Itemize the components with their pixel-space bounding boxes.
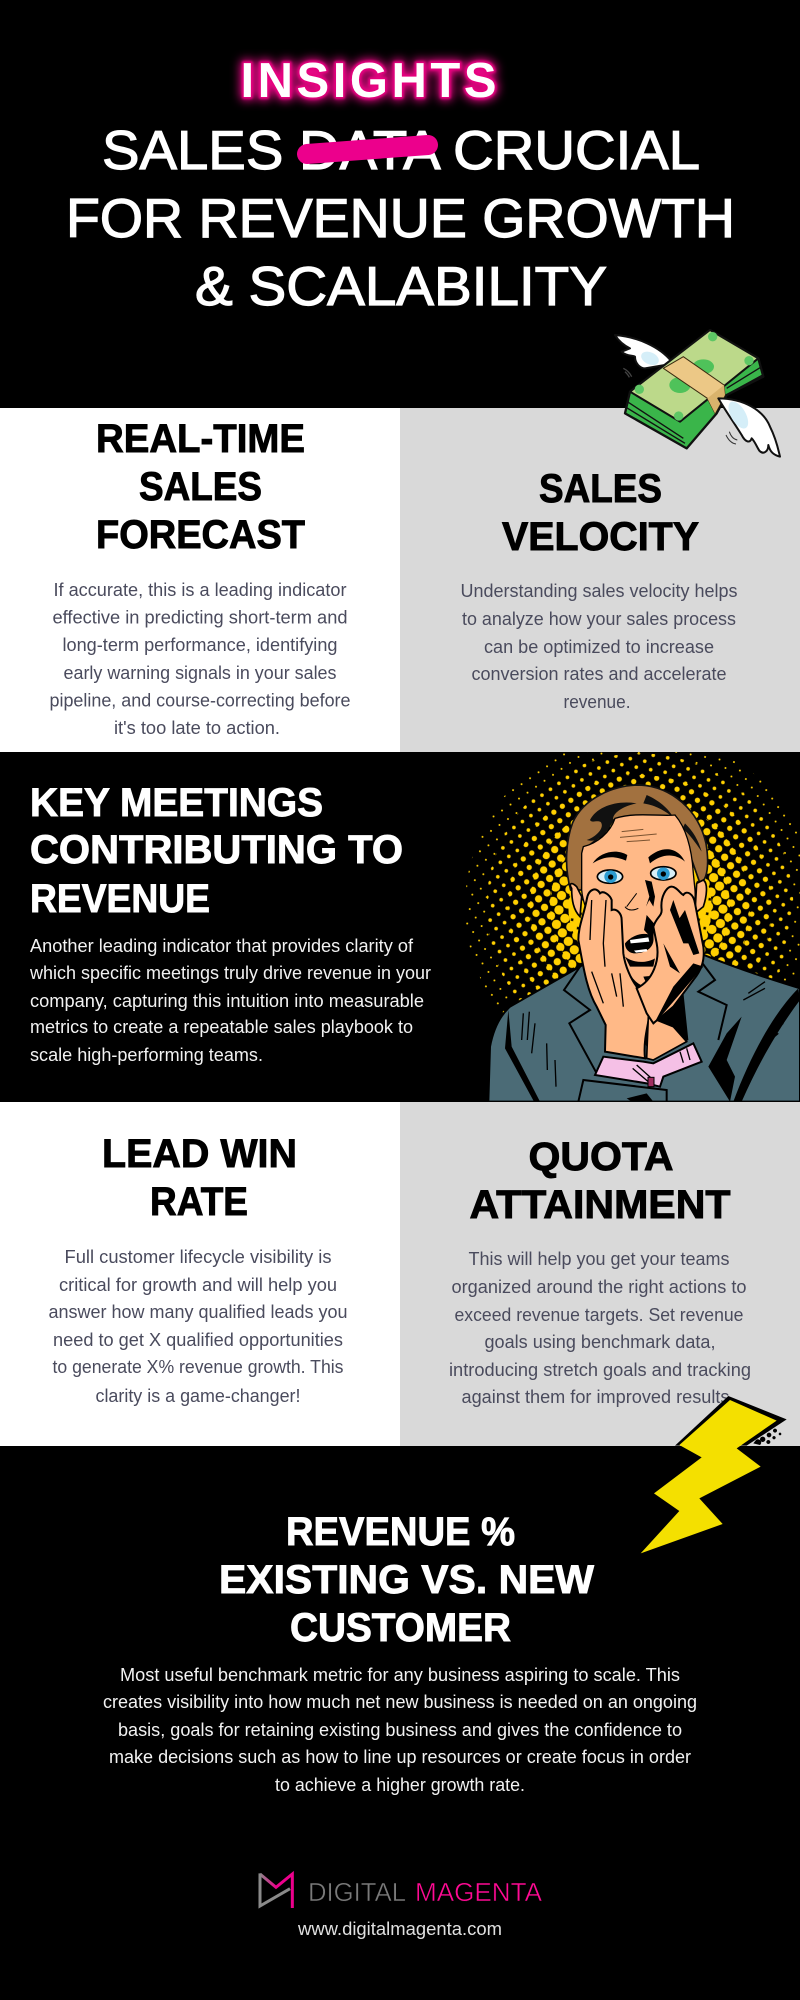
body text: lead win rate: Full customer lifecycle visibility is	[64, 1247, 332, 1267]
heading: lead win rate: RATE	[150, 1180, 248, 1224]
body text: lead win rate: answer how many qualified leads you	[48, 1302, 348, 1322]
body text: sales velocity: can be optimized to increase	[484, 637, 714, 657]
panel: quota attainment	[400, 1102, 800, 1446]
main title: SALES DATA CRUCIAL	[102, 119, 700, 181]
body text: sales velocity	[460, 581, 738, 712]
body text: quota attainment: against them for improved results.	[462, 1387, 734, 1407]
heading: sales velocity: VELOCITY	[502, 515, 699, 559]
body text: sales velocity: revenue.	[564, 692, 630, 712]
panel: real-time sales forecast	[0, 408, 400, 752]
body text: revenue existing vs new: creates visibility into how much net new business is needed on an ongoing	[103, 1692, 697, 1712]
main title: & SCALABILITY	[195, 255, 607, 317]
body text: real-time sales forecast: long-term performance, identifying	[62, 635, 338, 655]
heading: key meetings contributing to revenue: REVENUE	[30, 877, 210, 921]
body text: key meetings: scale high-performing teams.	[30, 1045, 263, 1065]
body text: quota attainment: This will help you get your teams	[468, 1249, 730, 1269]
logo: digital magenta	[260, 1873, 542, 1939]
panel: revenue existing vs new	[0, 1446, 800, 2000]
heading: real-time sales forecast: REAL-TIME	[96, 417, 305, 461]
heading: revenue existing vs new customer: EXISTING VS. NEW	[219, 1558, 594, 1602]
heading: sales velocity	[502, 467, 699, 559]
body text: real-time sales forecast: early warning signals in your sales	[64, 663, 336, 683]
main title: FOR REVENUE GROWTH	[66, 187, 735, 249]
heading: sales velocity: SALES	[539, 467, 662, 511]
body text: real-time sales forecast	[50, 580, 350, 738]
body text: quota attainment: exceed revenue targets. Set revenue	[454, 1305, 744, 1325]
body text: quota attainment: goals using benchmark data,	[484, 1332, 716, 1352]
body text: lead win rate: need to get X qualified opportunities	[53, 1330, 343, 1350]
heading: quota attainment: ATTAINMENT	[470, 1183, 730, 1227]
panel: sales velocity	[400, 408, 800, 752]
heading: real-time sales forecast: SALES	[139, 465, 262, 509]
panel: key meetings	[0, 732, 800, 1102]
illustration: lightning bolt	[641, 1396, 787, 1553]
body text: lead win rate: critical for growth and will help you	[59, 1275, 337, 1295]
heading: key meetings contributing to revenue: CONTRIBUTING TO	[30, 828, 403, 872]
body text: real-time sales forecast: it's too late to action.	[114, 718, 280, 738]
body text: lead win rate	[48, 1247, 348, 1406]
title block	[66, 54, 735, 317]
logo wordmark: DIGITAL	[308, 1879, 406, 1907]
body text: quota attainment: organized around the right actions to	[452, 1277, 746, 1297]
magenta strikethrough over DATA	[307, 145, 428, 154]
body text: key meetings: metrics to create a repeatable sales playbook to	[30, 1017, 413, 1037]
body text: real-time sales forecast: effective in predicting short-term and	[52, 608, 348, 628]
body text: real-time sales forecast: pipeline, and course-correcting before	[50, 690, 350, 710]
heading: lead win rate	[102, 1132, 297, 1224]
heading: revenue existing vs new customer: CUSTOMER	[290, 1606, 511, 1650]
body text: real-time sales forecast: If accurate, this is a leading indicator	[54, 580, 347, 600]
neon label: insights: INSIGHTS	[240, 54, 496, 108]
neon label: insights: INSIGHTS	[240, 54, 496, 108]
body text: quota attainment	[449, 1249, 751, 1407]
heading: lead win rate: LEAD WIN	[102, 1132, 297, 1176]
body text: key meetings: company, capturing this intuition into measurable	[30, 991, 424, 1011]
body text: key meetings: which specific meetings truly drive revenue in your	[29, 963, 431, 983]
body text: revenue existing vs new: basis, goals for retaining existing business and gives the confidence to	[118, 1720, 682, 1740]
body text: revenue existing vs new: Most useful benchmark metric for any business aspiring to scale. This	[120, 1665, 680, 1685]
heading: real-time sales forecast: FORECAST	[96, 513, 305, 557]
body text: revenue existing vs new: to achieve a higher growth rate.	[275, 1775, 525, 1795]
body text: key meetings: Another leading indicator that provides clarity of	[30, 936, 414, 956]
illustration: flying money stack	[615, 330, 780, 457]
heading: real-time sales forecast	[96, 417, 305, 557]
heading: revenue existing vs new customer	[219, 1510, 594, 1650]
website url: www.digitalmagenta.com	[297, 1919, 502, 1939]
body text: revenue existing vs new: make decisions such as how to line up resources or create focus in order	[109, 1747, 691, 1767]
body text: quota attainment: introducing stretch goals and tracking	[449, 1360, 751, 1380]
neon label: insights: INSIGHTS	[240, 54, 496, 108]
logo mark	[260, 1873, 292, 1908]
main title	[66, 119, 735, 317]
panel: lead win rate	[0, 1102, 400, 1446]
heading: key meetings contributing to revenue	[30, 781, 403, 921]
body text: sales velocity: Understanding sales velocity helps	[460, 581, 738, 601]
body text: key meetings	[29, 936, 431, 1065]
heading: quota attainment	[470, 1135, 730, 1227]
body text: sales velocity: conversion rates and accelerate	[472, 664, 726, 684]
body text: lead win rate: clarity is a game-changer!	[96, 1386, 300, 1406]
logo wordmark	[308, 1879, 542, 1907]
body text: lead win rate: to generate X% revenue growth. This	[52, 1357, 344, 1377]
illustration: shocked man with halftone background	[465, 732, 800, 1102]
body text: revenue existing vs new	[103, 1665, 697, 1795]
body text: sales velocity: to analyze how your sales process	[462, 609, 736, 629]
logo wordmark: MAGENTA	[415, 1879, 542, 1907]
heading: quota attainment: QUOTA	[528, 1135, 674, 1179]
heading: key meetings contributing to revenue: KEY MEETINGS	[30, 781, 323, 825]
heading: revenue existing vs new customer: REVENUE %	[286, 1510, 515, 1554]
